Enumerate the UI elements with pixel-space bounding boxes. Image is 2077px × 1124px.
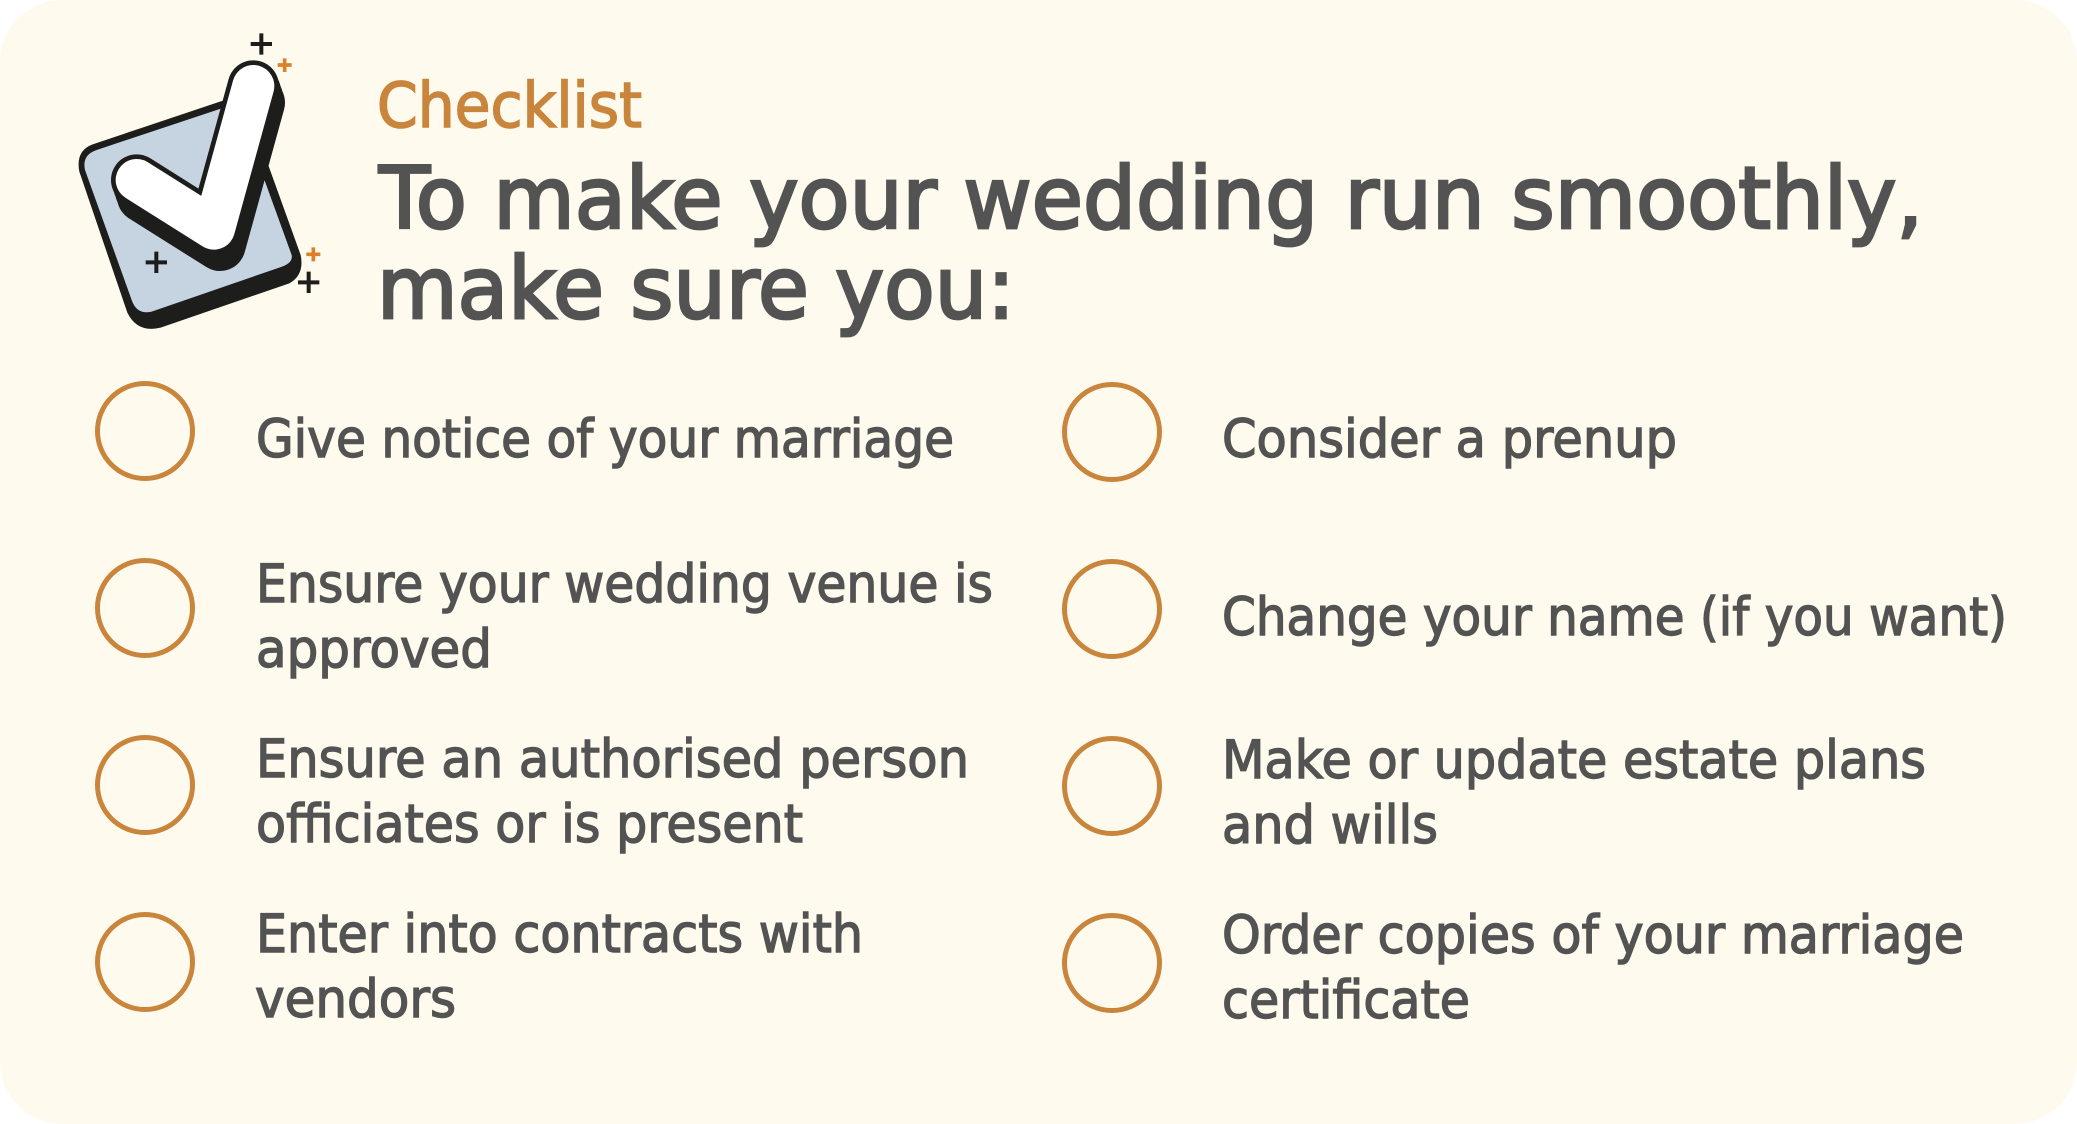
item: vendors: vendors xyxy=(255,969,456,1030)
heading: To make your wedding run smoothly, xyxy=(378,149,1923,249)
item: wedding venue xyxy=(98,554,993,680)
item: estate plans: Make or update estate plans xyxy=(1222,730,1926,791)
item: estate plans xyxy=(1064,730,1926,856)
item: prenup xyxy=(1064,384,1677,480)
item: authorised person xyxy=(98,729,969,855)
item: marriage certificate: Order copies of your marriage xyxy=(1222,905,1964,966)
item: authorised person: officiates or is present xyxy=(256,794,803,855)
item: give notice xyxy=(98,384,954,478)
item: prenup: Consider a prenup xyxy=(1222,409,1677,470)
item: give notice: Give notice of your marriage xyxy=(256,409,954,470)
item: authorised person: Ensure an authorised person xyxy=(256,729,969,790)
heading: make sure you: xyxy=(377,239,1015,339)
item: change name xyxy=(1064,562,2007,656)
heading xyxy=(377,149,1923,339)
item: wedding venue: approved xyxy=(256,619,492,680)
item: vendors: Enter into contracts with xyxy=(256,904,863,965)
item: wedding venue: Ensure your wedding venue is xyxy=(256,554,993,615)
item: estate plans: and wills xyxy=(1222,795,1438,856)
item: marriage certificate: certificate xyxy=(1222,970,1470,1031)
item: change name: Change your name (if you want) xyxy=(1222,587,2007,648)
eyebrow: Checklist: Checklist xyxy=(377,69,642,142)
icon: checkmark box xyxy=(79,33,320,329)
item: vendors xyxy=(98,904,863,1030)
item: marriage certificate xyxy=(1064,905,1964,1031)
